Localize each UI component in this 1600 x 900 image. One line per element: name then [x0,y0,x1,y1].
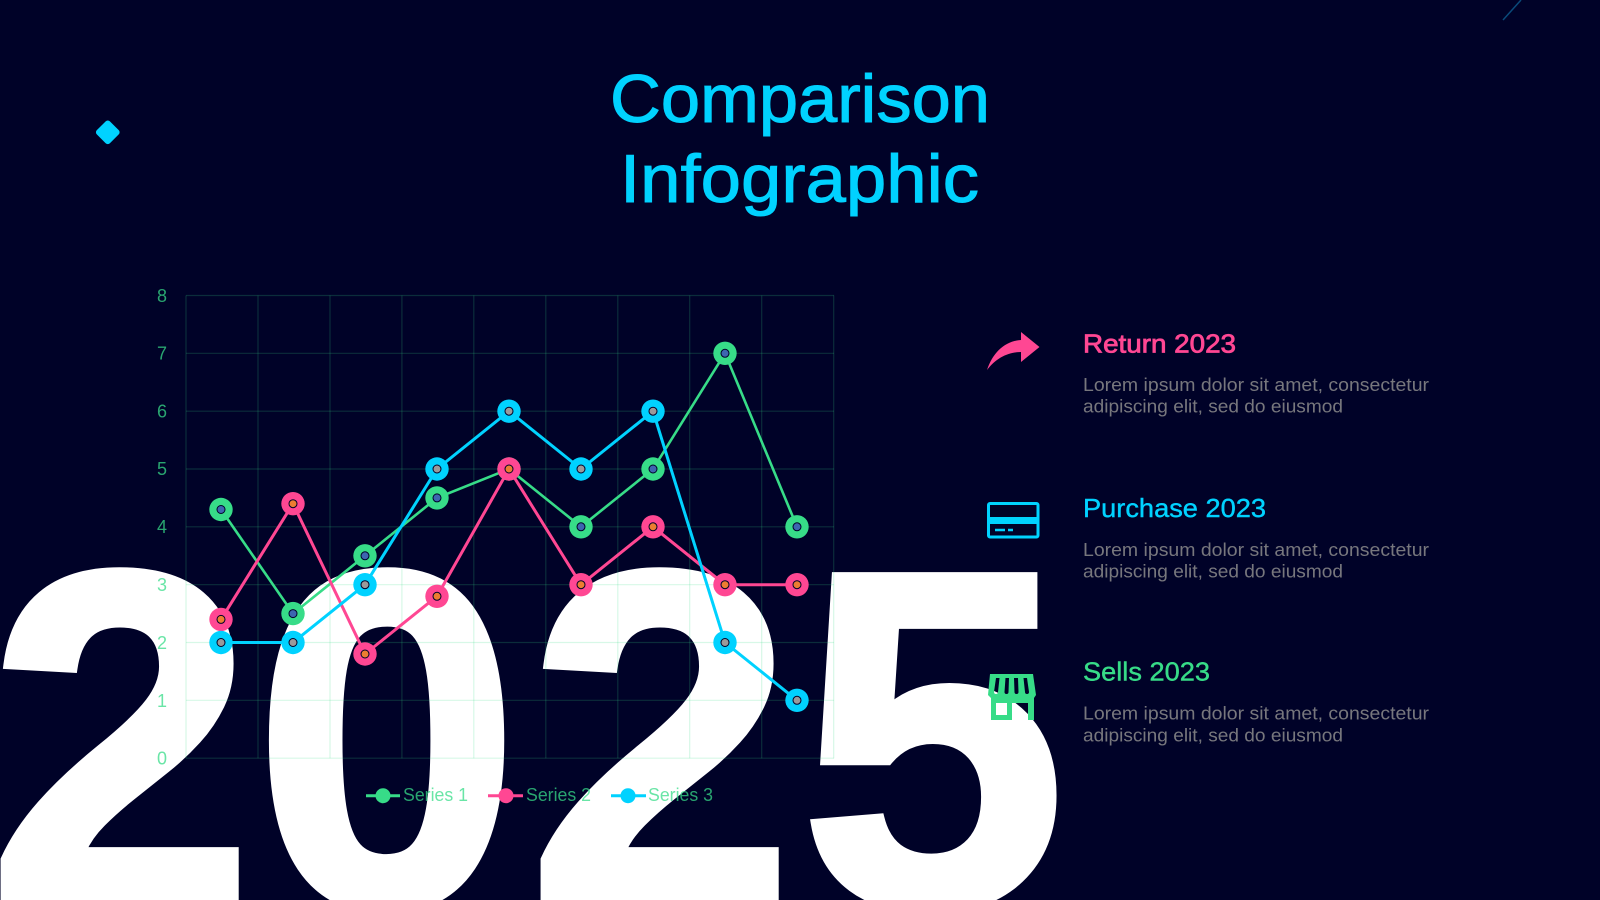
icon: return arrow [987,332,1040,370]
text: sells description: adipiscing elit, sed do eiusmod [1083,724,1343,746]
text: return description: Lorem ipsum dolor sit amet, consectetur [1083,374,1429,395]
decorative corner line [1503,0,1521,20]
y axis labels: 0 [157,748,167,768]
y axis labels: 8 [157,286,167,306]
chart legend [366,784,713,805]
title: Comparison [610,61,990,137]
y axis labels: 6 [157,402,167,422]
chart gridlines [186,296,834,758]
panel: sells 2023 [988,657,1429,746]
chart legend: Series 3 [648,784,713,805]
text: purchase description [1083,539,1429,582]
chart legend: Series 2 [526,784,591,805]
text: purchase description: adipiscing elit, sed do eiusmod [1083,561,1343,582]
series 3 markers [209,400,809,712]
text: return description: adipiscing elit, sed do eiusmod [1083,396,1343,417]
line chart [157,286,834,805]
icon: store [988,674,1036,720]
series 1 line [221,353,797,614]
y axis labels: 3 [157,575,167,595]
heading: return: Return 2023 [1083,329,1236,359]
text: sells description [1083,702,1429,746]
y axis labels: 4 [157,517,167,537]
y axis labels: 7 [157,344,167,364]
icon: diamond [95,119,121,145]
series 2 markers [209,457,809,666]
title [610,61,990,217]
series 1 markers [209,342,809,625]
y axis labels: 2 [157,633,167,653]
y axis labels: 1 [157,691,167,711]
icon: credit card [988,504,1038,537]
title: Infographic [620,141,979,217]
y axis labels [157,286,167,768]
panel: return 2023 [987,329,1429,417]
heading: purchase: Purchase 2023 [1083,493,1266,523]
text: sells description: Lorem ipsum dolor sit amet, consectetur [1083,702,1429,724]
y axis labels: 5 [157,459,167,479]
series 3 line [221,411,797,700]
series 2 line [221,469,797,654]
text: return description [1083,374,1429,417]
chart legend: Series 1 [403,784,468,805]
panel: purchase 2023 [988,493,1429,582]
text: purchase description: Lorem ipsum dolor sit amet, consectetur [1083,539,1429,560]
heading: sells: Sells 2023 [1083,657,1210,687]
